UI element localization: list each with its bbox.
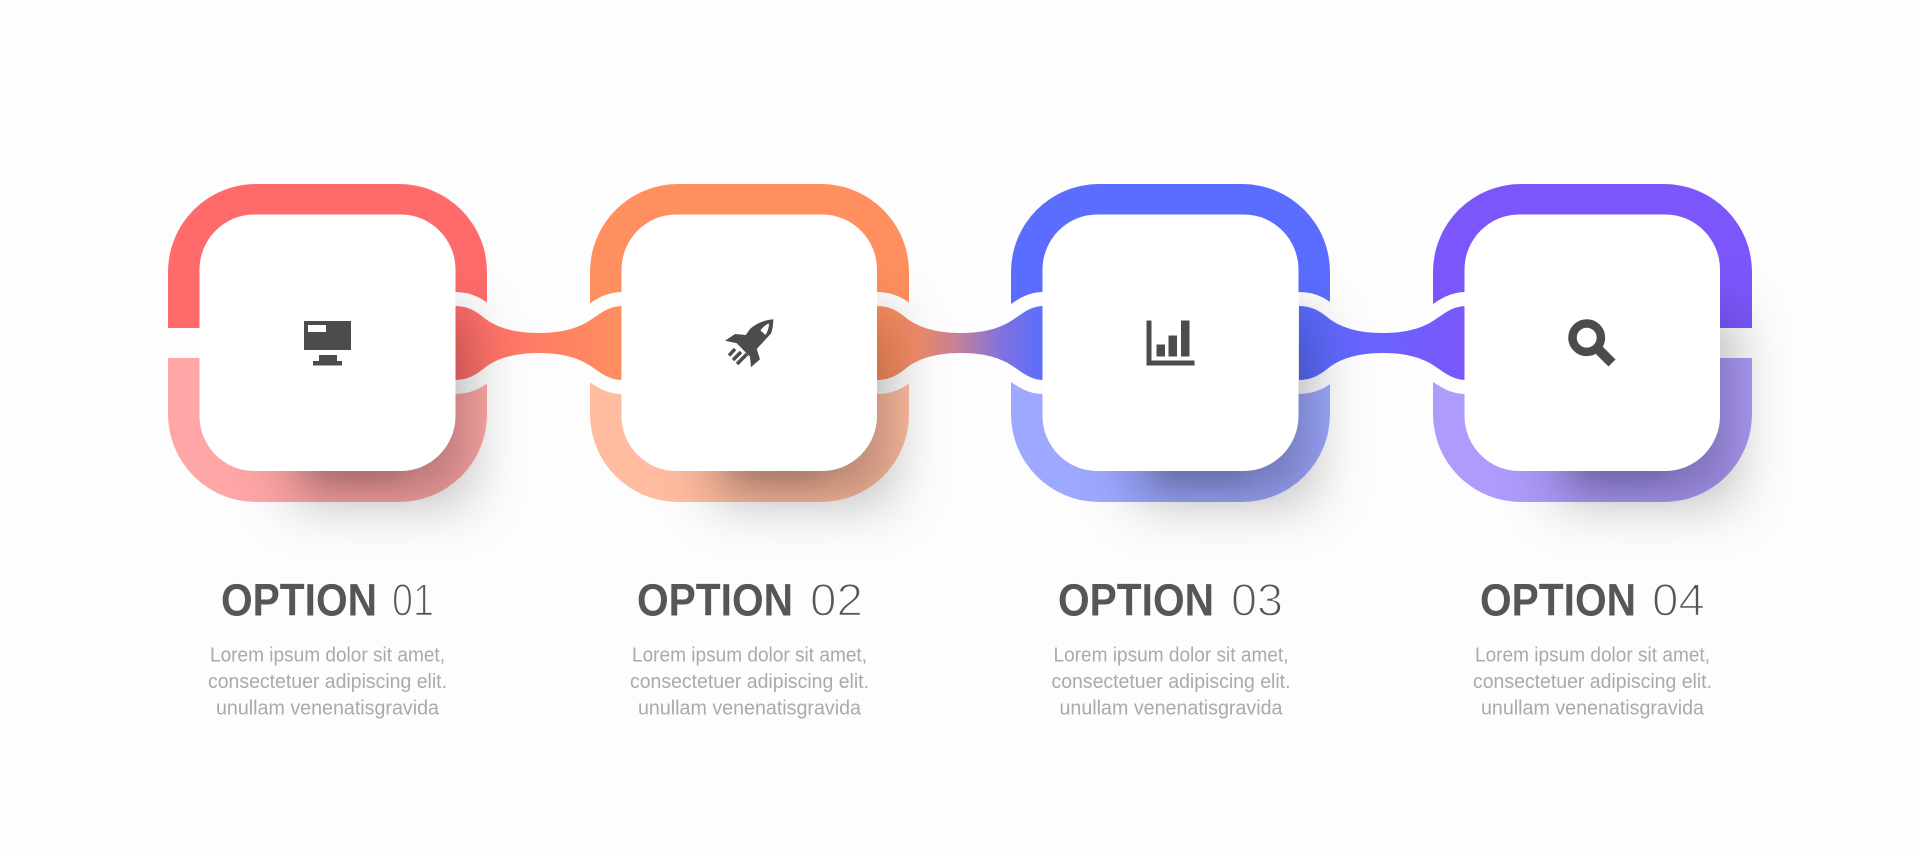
heading: option 01: OPTION	[221, 574, 377, 626]
ring: option 01	[168, 184, 487, 502]
icon: bar chart	[1146, 320, 1194, 366]
icon: magnifier	[1572, 324, 1612, 363]
text block: option 01: consectetuer adipiscing elit.	[208, 671, 447, 693]
text block: option 04	[1473, 644, 1712, 720]
text block: option 04: unullam venenatisgravida	[1481, 698, 1705, 720]
text block: option 04: consectetuer adipiscing elit.	[1473, 671, 1712, 693]
heading: option 01: 01	[392, 574, 434, 626]
text block: option 02	[630, 644, 869, 720]
text block: option 03: Lorem ipsum dolor sit amet,	[1054, 644, 1288, 666]
text block: option 02: Lorem ipsum dolor sit amet,	[632, 644, 867, 666]
white card: option 04	[1464, 214, 1720, 471]
white card: option 01	[200, 214, 456, 471]
text block: option 01: unullam venenatisgravida	[216, 698, 440, 720]
heading: option 03: OPTION	[1058, 574, 1214, 626]
connector: 01 to 02	[455, 306, 623, 380]
icon: monitor	[304, 321, 351, 366]
heading: option 04: 04	[1652, 574, 1705, 626]
ring: option 02	[590, 184, 909, 502]
heading: option 04: OPTION	[1480, 574, 1636, 626]
text block: option 03: unullam venenatisgravida	[1060, 698, 1283, 720]
coloured rings	[168, 184, 1752, 502]
ring: option 03	[1011, 184, 1330, 502]
icon: rocket	[725, 319, 773, 367]
white card: option 02	[622, 214, 877, 471]
text block: option 03: consectetuer adipiscing elit.	[1052, 671, 1290, 693]
connector: 02 to 03	[877, 306, 1044, 380]
heading: option 03: 03	[1231, 574, 1283, 626]
ring: option 04	[1433, 184, 1752, 502]
text block: option 01	[208, 644, 447, 720]
text block: option 01: Lorem ipsum dolor sit amet,	[210, 644, 445, 666]
white card: option 03	[1042, 214, 1298, 471]
heading: option 02: 02	[810, 574, 863, 626]
text block: option 02: unullam venenatisgravida	[638, 698, 862, 720]
heading: option 02: OPTION	[637, 574, 793, 626]
drop shadows	[292, 315, 1733, 500]
text block: option 04: Lorem ipsum dolor sit amet,	[1475, 644, 1710, 666]
text block: option 02: consectetuer adipiscing elit.	[630, 671, 869, 693]
connector: 03 to 04	[1299, 306, 1467, 380]
text block: option 03	[1052, 644, 1290, 720]
